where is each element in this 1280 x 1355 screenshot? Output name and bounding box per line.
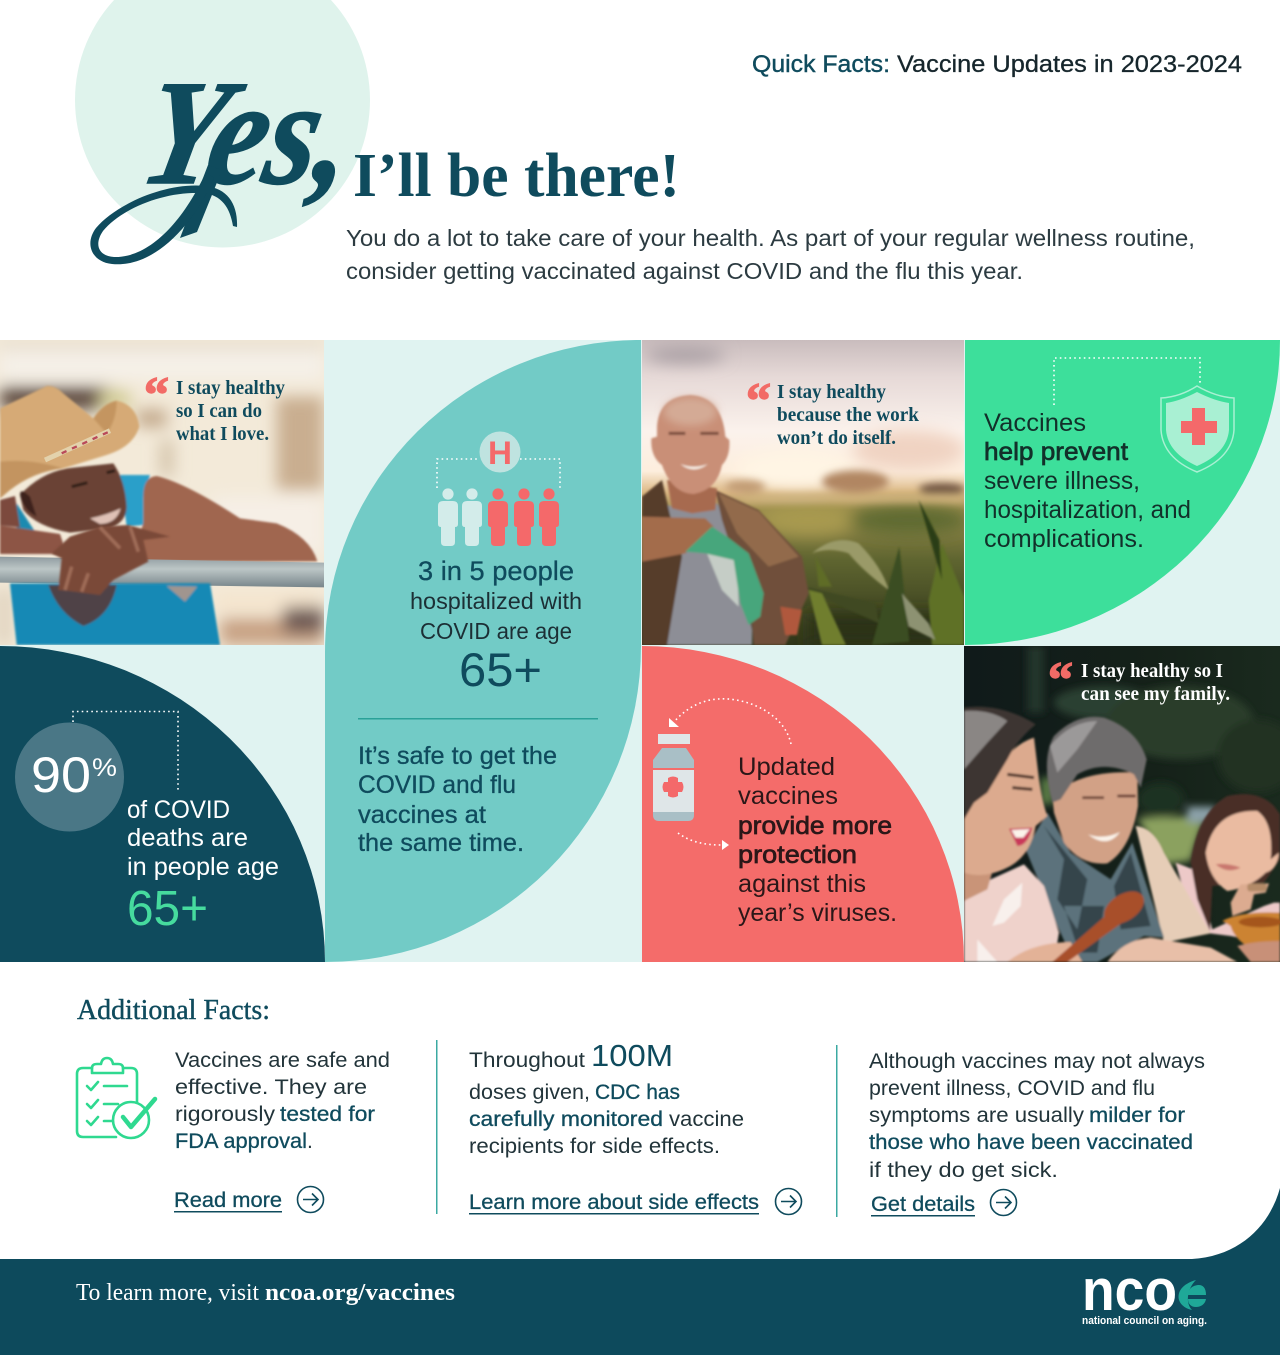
stat text: 3 in 5 people hospitalized with COVID are age 65+: hospitalized with	[410, 588, 582, 614]
footer call to action: ncoa.org/vaccines	[265, 1280, 455, 1306]
fact column: 100M doses monitored: doses given,	[469, 1081, 590, 1104]
fact column: tested for FDA approval	[174, 1049, 390, 1212]
link: Learn more about side effects: Learn more about side effects	[469, 1191, 759, 1214]
quote: I stay healthy because the work won't do itself: I stay healthy	[777, 381, 886, 403]
stat: 90%: 90	[31, 747, 91, 803]
header link line: Quick Facts	[752, 51, 1242, 78]
footer call to action	[76, 1280, 455, 1306]
icon: hospital H with dotted bracket	[437, 432, 560, 488]
link: Read more	[174, 1186, 324, 1212]
fact column: 100M doses monitored: carefully monitored	[469, 1108, 663, 1131]
panel: coral quarter - updated vaccines	[642, 646, 964, 962]
logo: ncoa: national council on aging.	[1082, 1315, 1207, 1327]
fact column: 100M doses monitored: Throughout	[469, 1049, 585, 1072]
fact column: 100M doses monitored: 100M	[591, 1038, 673, 1073]
text: updated vaccines provide more protection: against this	[738, 870, 866, 898]
text: of COVID deaths are in people age 65+: deaths are	[127, 824, 248, 852]
arrow: dotted arc from bottle	[678, 833, 729, 850]
footer band	[0, 1188, 1280, 1355]
photo panel: man in corn field	[642, 340, 964, 645]
link: Read more: Read more	[174, 1189, 282, 1212]
text: of COVID deaths are in people age 65+: in people age	[127, 853, 279, 881]
text: vaccines help prevent severe illness: complications.	[984, 525, 1144, 553]
link: Get details	[871, 1190, 1016, 1216]
fact column: milder for vaccinated: if they do get sick.	[869, 1159, 1058, 1182]
text: safe to get both vaccines at the same time	[358, 742, 557, 857]
quote: I stay healthy so I can do what I love: “	[144, 366, 169, 422]
quote: I stay healthy so I can do what I love: I stay healthy	[176, 377, 285, 399]
heading: I'll be there!: I’ll be there!	[353, 142, 680, 210]
fact column: milder for vaccinated: prevent illness, COVID and flu	[869, 1077, 1155, 1100]
fact column: milder for vaccinated	[869, 1050, 1205, 1216]
text: safe to get both vaccines at the same time: the same time.	[358, 829, 524, 857]
text: safe to get both vaccines at the same time: COVID and flu	[358, 771, 516, 799]
photo panel: woman in straw hat	[0, 340, 324, 645]
fact column: milder for vaccinated: Although vaccines may not always	[869, 1050, 1205, 1073]
icon: shield with cross	[1161, 386, 1234, 472]
icon: clipboard with check	[77, 1058, 155, 1138]
fact column: tested for FDA approval: Vaccines are safe and	[175, 1049, 390, 1072]
quote: I stay healthy because the work won't do itself: “	[746, 372, 771, 428]
panel: center teal leaf with hospital statistic	[325, 340, 641, 962]
text: updated vaccines provide more protection: year’s viruses.	[738, 899, 897, 927]
fact column: milder for vaccinated: symptoms are usually	[869, 1104, 1085, 1127]
text: vaccines help prevent severe illness	[984, 409, 1191, 553]
icon: logo mark	[1179, 1280, 1206, 1310]
script heading: Yes,	[90, 49, 371, 264]
quote: I stay healthy so I can see my family: can see my family.	[1081, 683, 1230, 705]
logo: ncoa: nco	[1082, 1258, 1177, 1323]
text: updated vaccines provide more protection: vaccines	[738, 782, 838, 810]
fact column: tested for FDA approval: rigorously	[175, 1103, 276, 1126]
fact column: tested for FDA approval: .	[307, 1130, 313, 1153]
quote: I stay healthy so I can see my family: “	[1048, 651, 1073, 707]
fact column: 100M doses monitored: vaccine	[669, 1108, 744, 1131]
stat: 90%	[31, 747, 117, 803]
text: of COVID deaths are in people age 65+	[127, 796, 279, 936]
stat text: 3 in 5 people hospitalized with COVID are age 65+: COVID are age	[420, 618, 572, 644]
panel grid background	[0, 340, 1280, 962]
fact column: tested for FDA approval: tested for	[280, 1103, 375, 1126]
text: updated vaccines provide more protection: provide more	[738, 812, 892, 840]
icon: hospital H with dotted bracket: H	[488, 435, 512, 471]
panel: navy quarter - 90% of COVID deaths	[0, 646, 325, 962]
stat: 90%: %	[92, 754, 117, 782]
stat text: 3 in 5 people hospitalized with COVID are age 65+	[410, 556, 582, 696]
footer call to action: To learn more, visit	[76, 1280, 259, 1306]
icon: vaccine bottle	[653, 734, 694, 821]
intro paragraph: You do a lot to take care of your health. As part of your regular wellness routine,	[346, 225, 1195, 251]
text: vaccines help prevent severe illness: severe illness,	[984, 467, 1140, 495]
script heading: Yes,: Yes,	[129, 49, 371, 216]
text: of COVID deaths are in people age 65+: 65+	[127, 882, 208, 936]
quote: I stay healthy so I can do what I love: what I love.	[176, 423, 269, 445]
quote: I stay healthy so I can do what I love: so I can do	[176, 400, 262, 422]
fact column: tested for FDA approval: effective. They are	[175, 1076, 367, 1099]
fact column: 100M doses monitored	[469, 1038, 802, 1214]
text: safe to get both vaccines at the same time: It’s safe to get the	[358, 742, 557, 770]
arrow: dotted arc to bottle	[669, 699, 791, 744]
header: background circle	[75, 0, 370, 248]
text: updated vaccines provide more protection: protection	[738, 841, 857, 869]
link: Get details: Get details	[871, 1193, 975, 1216]
panel: green quarter - vaccines help prevent	[965, 340, 1280, 645]
text: updated vaccines provide more protection: Updated	[738, 753, 835, 781]
stat text: 3 in 5 people hospitalized with COVID are age 65+: 65+	[459, 643, 542, 696]
text: safe to get both vaccines at the same time: vaccines at	[358, 801, 486, 829]
heading: Additional Facts: Additional Facts:	[77, 995, 270, 1026]
text: vaccines help prevent severe illness: Vaccines	[984, 409, 1086, 437]
quote: I stay healthy because the work won't do itself: because the work	[777, 404, 920, 426]
text: vaccines help prevent severe illness: help prevent	[984, 438, 1128, 466]
header link line: Quick Facts: Quick Facts:	[752, 51, 890, 78]
fact column: 100M doses monitored: CDC has	[595, 1081, 680, 1104]
fact column: 100M doses monitored: recipients for side effects.	[469, 1135, 720, 1158]
text: vaccines help prevent severe illness: hospitalization, and	[984, 496, 1191, 524]
text: updated vaccines provide more protection	[738, 753, 897, 927]
header link line: Quick Facts: Vaccine Updates in 2023-2024	[897, 51, 1242, 78]
fact column: milder for vaccinated: milder for	[1089, 1104, 1185, 1127]
quote: I stay healthy because the work won't do itself	[746, 372, 920, 449]
fact column: tested for FDA approval: FDA approval	[175, 1130, 307, 1153]
intro paragraph: consider getting vaccinated against COVID and the flu this year.	[346, 258, 1023, 284]
text: of COVID deaths are in people age 65+: of COVID	[127, 796, 230, 824]
photo panel: three generations of women	[964, 646, 1280, 962]
quote: I stay healthy so I can see my family	[1048, 651, 1230, 707]
quote: I stay healthy because the work won't do itself: won’t do itself.	[777, 427, 896, 449]
intro paragraph	[346, 225, 1195, 284]
icon: five people, three highlighted	[438, 488, 559, 546]
stat text: 3 in 5 people hospitalized with COVID are age 65+: 3 in 5 people	[418, 556, 574, 586]
fact column: milder for vaccinated: those who have been vaccinated	[869, 1131, 1193, 1154]
quote: I stay healthy so I can do what I love	[144, 366, 285, 445]
quote: I stay healthy so I can see my family: I stay healthy so I	[1081, 660, 1223, 682]
